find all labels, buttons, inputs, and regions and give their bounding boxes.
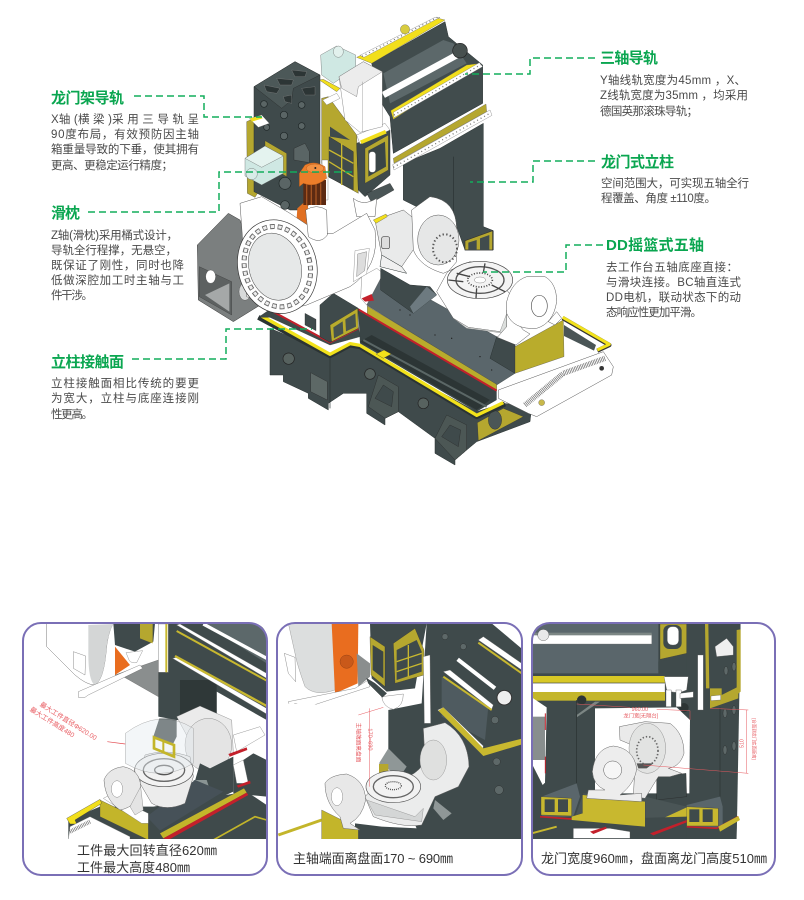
body text: 去工作台五轴底座直接： bbox=[606, 260, 738, 274]
body text: 更高、更稳定运行精度； bbox=[51, 158, 173, 172]
DD cradle five-axis table bbox=[375, 197, 562, 345]
leader line bbox=[483, 245, 603, 272]
caption bbox=[77, 843, 217, 875]
panel border bbox=[532, 623, 775, 875]
leader line bbox=[132, 329, 312, 359]
panel: gantry width bbox=[532, 623, 798, 875]
leader line bbox=[470, 161, 595, 182]
panel scene: 最大工件直径Φ620.00 bbox=[38, 700, 99, 742]
callout: gantry guide rail bbox=[51, 89, 262, 172]
body text: 与滑块连接。BC轴直连式 bbox=[606, 275, 742, 289]
panel scene: 170~690 bbox=[366, 728, 372, 751]
orange spindle motor bbox=[297, 163, 328, 240]
heading: DD摇篮式五轴 bbox=[606, 236, 704, 254]
body text: 90度布局，有效预防因主轴 bbox=[51, 127, 199, 141]
gray rear bracket bbox=[197, 213, 268, 322]
spindle ram barrel bbox=[227, 197, 376, 323]
body text: Z线轨宽度为35mm ，均采用 bbox=[600, 88, 748, 102]
body text: X轴 (横 梁 )采 用 三 导 轨 呈 bbox=[51, 112, 199, 126]
body text bbox=[601, 176, 749, 205]
body text: 件干涉。 bbox=[51, 288, 93, 302]
body text: 低做深腔加工时主轴与工 bbox=[51, 273, 184, 287]
main machine illustration bbox=[197, 17, 613, 465]
white ram cylinder bbox=[306, 207, 387, 240]
body text: 既保证了刚性，同时也降 bbox=[51, 258, 184, 272]
panel scene: 960.00 bbox=[632, 707, 648, 713]
body text: Z轴(滑枕)采用桶式设计， bbox=[51, 228, 178, 242]
panel scene: 龙门宽[无隔台] bbox=[623, 711, 659, 719]
panel: spindle to table distance bbox=[277, 623, 523, 875]
spindle head carriage bbox=[319, 46, 394, 217]
callout: DD cradle bbox=[483, 236, 742, 319]
callout: three-axis rails bbox=[465, 49, 748, 118]
caption: 工件最大回转直径620㎜ bbox=[77, 843, 217, 858]
machine base bbox=[258, 268, 613, 465]
gantry column and beam bbox=[357, 17, 493, 250]
leader line bbox=[88, 172, 356, 212]
panel: workpiece envelope bbox=[23, 623, 267, 875]
body text: Y轴线轨宽度为45mm ，X、 bbox=[600, 73, 746, 87]
panel border bbox=[277, 623, 522, 875]
body text: 德国英那滚珠导轨； bbox=[600, 104, 698, 118]
panel scene bbox=[28, 623, 267, 840]
panel scene: 最大工件高度480 bbox=[28, 705, 77, 740]
panel scene bbox=[278, 623, 523, 840]
body text: DD电机，联动状态下的动 bbox=[606, 290, 741, 304]
body text bbox=[51, 376, 200, 421]
caption: 主轴端面离盘面170 ~ 690㎜ bbox=[293, 851, 453, 866]
body text: 空间范围大，可实现五轴全行 bbox=[601, 176, 749, 190]
body text: 箱重量导致的下垂，使其拥有 bbox=[51, 142, 199, 156]
panel scene: [台面到龙门底面距离] bbox=[751, 718, 758, 760]
heading: 立柱接触面 bbox=[51, 353, 124, 371]
panel scene: 510 bbox=[739, 739, 745, 748]
panel scene bbox=[533, 624, 756, 839]
body text: 为宽大，立柱与底座连接刚 bbox=[51, 391, 199, 405]
body text bbox=[600, 73, 748, 118]
left column bbox=[245, 62, 320, 210]
body text: 导轨全行程撑，无悬空， bbox=[51, 243, 177, 257]
leader line bbox=[134, 96, 262, 117]
panel scene: 主轴端面离盘面 bbox=[355, 723, 363, 763]
body text: 程覆盖、角度 ±110度。 bbox=[601, 191, 716, 205]
panel border bbox=[23, 623, 267, 875]
leader line bbox=[465, 58, 595, 74]
body text bbox=[51, 228, 184, 302]
callout: ram bbox=[51, 172, 356, 302]
body text: 立柱接触面相比传统的要更 bbox=[51, 376, 200, 390]
caption: 工件最大高度480㎜ bbox=[77, 860, 190, 875]
heading: 龙门式立柱 bbox=[601, 153, 674, 171]
heading: 滑枕 bbox=[51, 204, 80, 222]
body text: 性更高。 bbox=[51, 407, 93, 421]
body text bbox=[51, 112, 199, 172]
caption: 龙门宽度960㎜，盘面离龙门高度510㎜ bbox=[541, 851, 767, 866]
callout: gantry column bbox=[470, 153, 749, 205]
heading: 龙门架导轨 bbox=[51, 89, 124, 107]
heading: 三轴导轨 bbox=[600, 49, 658, 67]
callout: column contact surface bbox=[51, 329, 312, 421]
body text bbox=[606, 260, 742, 319]
body text: 态响应性更加平滑。 bbox=[606, 305, 702, 319]
